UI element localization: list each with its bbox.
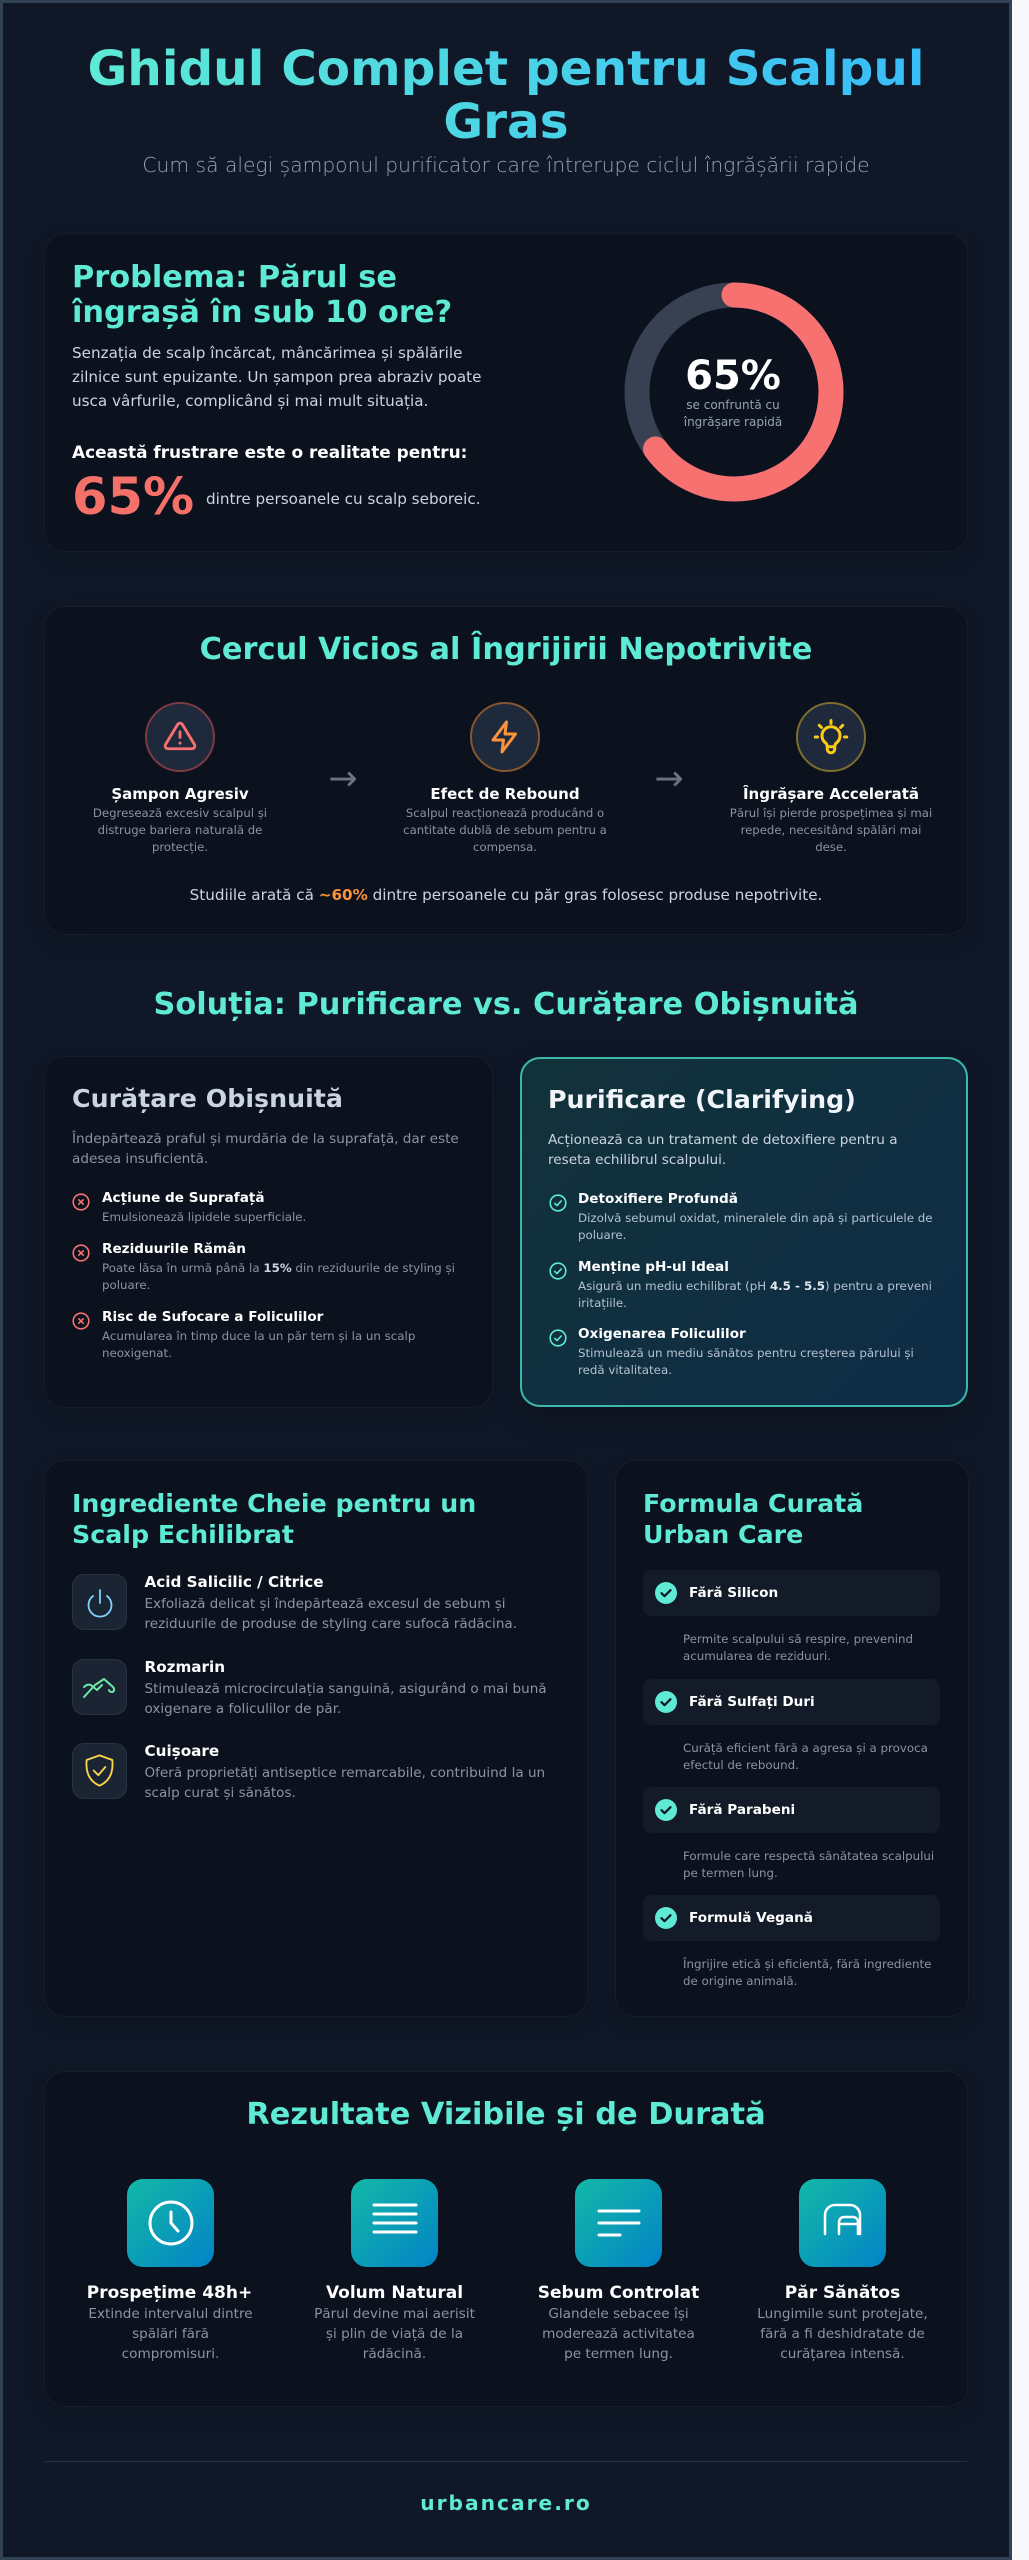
panel: clarifying [520,1057,968,1407]
claim text [683,1740,928,1774]
step title: Îngrășare Accelerată [743,785,919,803]
stat caption: dintre persoanele cu scalp seboreic. [206,490,481,508]
step description: Părul își pierde prospețimea și mai [730,806,932,820]
result 4 [737,2179,948,2369]
claim text [683,1848,934,1882]
result text: pe termen lung. [564,2346,673,2362]
claim text [683,1956,931,1990]
claim title: Fără Parabeni [689,1802,795,1818]
icon: cross [72,1312,90,1330]
claim text: pe termen lung. [683,1866,778,1880]
result text: fără a fi deshidratate de [760,2326,925,2342]
icon: power [72,1574,127,1630]
ingredient text: scalp curat și sănătos. [144,1785,296,1801]
description: Acționează ca un tratament de detoxifiere pentru a [548,1132,898,1148]
problem description: zilnice sunt epuizante. Un șampon prea abraziv poate [72,368,481,386]
claim 3 [643,1787,940,1887]
result text: Extinde intervalul dintre [88,2306,253,2322]
claim title: Formulă Vegană [689,1910,813,1926]
item title: Detoxifiere Profundă [578,1191,738,1207]
icon: check badge [655,1582,677,1604]
step description: Degresează excesiv scalpul și [93,806,267,820]
result text: Lungimile sunt protejate, [757,2306,928,2322]
study note: Studiile arată că ~60% dintre persoanele cu păr gras folosesc produse nepotrivite. [190,886,822,904]
title: Gras [443,94,569,150]
icon: check badge [655,1691,677,1713]
item title: Risc de Sufocare a Foliculilor [102,1309,323,1325]
arrow 2: → [654,759,684,799]
description: adesea insuficientă. [72,1151,208,1167]
item text: redă vitalitatea. [578,1363,672,1377]
heading: Urban Care [643,1520,803,1548]
title: Ghidul Complet pentru Scalpul [87,41,925,97]
donut caption: se confruntă cu [686,398,780,412]
item 1 [72,1190,306,1224]
ingredient text: oxigenare a foliculilor de păr. [144,1701,341,1717]
item 2 [72,1241,455,1292]
item 3 [72,1309,415,1360]
claim title: Fără Silicon [689,1585,778,1601]
result text [737,2304,948,2364]
result text [513,2304,724,2364]
icon: shield [72,1743,127,1799]
claim text [683,1630,913,1664]
claim row [643,1787,940,1833]
panel: vicious cycle [45,607,967,934]
claim 1 [643,1570,940,1662]
claim text: de origine animală. [683,1974,797,1988]
heading: vicious cycle: Cercul Vicios al Îngrijirii Nepotrivite [200,632,812,667]
donut caption: îngrășare rapidă [684,414,782,428]
step title: Șampon Agresiv [111,785,249,803]
item text: Dizolvă sebumul oxidat, mineralele din apă și particulele de [578,1211,933,1225]
result text [65,2304,276,2364]
description [548,1132,898,1168]
result text: spălări fără [132,2326,209,2342]
title [45,43,967,148]
icon: check [549,1262,567,1280]
item text: iritațiile. [578,1296,627,1310]
item 3 [549,1326,914,1377]
step description: cantitate dublă de sebum pentru a [403,823,607,837]
donut caption [684,398,782,429]
item text [102,1329,415,1360]
result title: Volum Natural [326,2283,463,2303]
heading: Purificare (Clarifying) [548,1085,856,1114]
icon: check badge [655,1799,677,1821]
step description [403,806,607,854]
result title: Păr Sănătos [785,2283,900,2303]
heading: Formula Curată [643,1489,863,1518]
icon: filter lines [575,2179,662,2267]
result title: Prospețime 48h+ [87,2283,252,2303]
icon: rosemary [72,1659,127,1715]
result text: Părul devine mai aerisit [314,2306,475,2322]
claim 4 [643,1895,940,1995]
ingredient 3 [72,1742,545,1801]
ingredient 1 [72,1573,517,1632]
item 2 [549,1259,932,1310]
ingredient title: Acid Salicilic / Citrice [144,1573,324,1591]
item title: Menține pH-ul Ideal [578,1259,729,1275]
item text [578,1211,933,1242]
result text: Glandele sebacee își [548,2306,689,2322]
heading [72,1489,476,1549]
heading: problem: îngrașă în sub 10 ore? [72,295,452,330]
icon: healthy hair arches [799,2179,886,2267]
ingredient text: Oferă proprietăți antiseptice remarcabile, contribuind la un [144,1765,545,1781]
claim text: Îngrijire etică și eficientă, fără ingrediente [683,1956,931,1970]
result text: rădăcină. [363,2346,426,2362]
ingredient title: Rozmarin [144,1658,225,1676]
heading [643,1489,863,1548]
result text: și plin de viață de la [326,2326,463,2342]
arrow 1: → [328,759,358,799]
problem description: usca vârfurile, complicând și mai mult situația. [72,392,428,410]
result 3 [513,2179,724,2369]
icon: cross [72,1244,90,1262]
claim row [643,1570,940,1616]
icon: cross [72,1193,90,1211]
heading: Scalp Echilibrat [72,1520,294,1549]
result text [289,2304,500,2364]
step description: repede, necesitând spălări mai [741,823,921,837]
result text: compromisuri. [122,2346,219,2362]
heading: Rezultate Vizibile și de Durată [246,2097,766,2132]
icon: clock [127,2179,214,2267]
result 2 [289,2179,500,2369]
step 1 [93,702,267,854]
item text: neoxigenat. [102,1346,172,1360]
ingredient text [144,1765,545,1801]
section heading: solution: Soluția: Purificare vs. Curățare Obișnuită [153,987,859,1022]
big stat 65%: 65% [72,468,194,527]
icon: check [549,1194,567,1212]
result 1 [65,2179,276,2369]
item title: Oxigenarea Foliculilor [578,1326,746,1342]
item text [102,1261,455,1292]
step title: Efect de Rebound [430,785,580,803]
claim text: efectul de rebound. [683,1758,799,1772]
item title: Acțiune de Suprafață [102,1190,265,1206]
icon: warning [145,702,215,772]
problem description [72,344,481,410]
ingredient text: Stimulează microcirculația sanguină, asigurând o mai bună [144,1681,547,1697]
heading: problem: Problema: Părul se [72,260,397,295]
icon: lines [351,2179,438,2267]
result text: curățarea intensă. [780,2346,905,2362]
problem description: Senzația de scalp încărcat, mâncărimea și spălările [72,344,462,362]
panel: clean formula [616,1461,968,2016]
step description: compensa. [473,840,537,854]
step description: protecție. [152,840,208,854]
frustration statement: Această frustrare este o realitate pentru: [72,442,467,462]
step 2 [403,702,607,854]
icon: lightning [470,702,540,772]
heading: problem [72,260,452,330]
step description: Scalpul reacționează producând o [406,806,604,820]
claim text: Permite scalpului să respire, prevenind [683,1632,913,1646]
item text: poluare. [578,1228,626,1242]
step description [730,806,932,854]
panel: results [45,2072,967,2406]
ingredient text: Exfoliază delicat și îndepărtează excesul de sebum și [144,1596,506,1612]
claim row [643,1895,940,1941]
panel: regular cleansing [45,1057,492,1407]
claim 2 [643,1679,940,1779]
description [72,1130,459,1167]
ingredient text: reziduurile de produse de styling care sufocă rădăcina. [144,1616,517,1632]
donut chart [624,282,844,502]
ingredient text [144,1596,517,1632]
step description [93,806,267,854]
description: Îndepărtează praful și murdăria de la suprafață, dar este [72,1130,459,1146]
ingredient 2 [72,1658,547,1717]
heading: Curățare Obișnuită [72,1084,343,1113]
icon: check [549,1329,567,1347]
item title: Reziduurile Rămân [102,1241,246,1257]
panel: problem [45,234,967,551]
item text: Emulsionează lipidele superficiale. [102,1210,306,1224]
claim text: Curăță eficient fără a agresa și a provoca [683,1740,928,1754]
step description: distruge bariera naturală de [98,823,262,837]
result text: moderează activitatea [542,2326,695,2342]
step 3 [730,702,932,854]
claim text: Formule care respectă sănătatea scalpului [683,1848,934,1862]
claim title: Fără Sulfați Duri [689,1694,815,1710]
item text: Stimulează un mediu sănătos pentru creșterea părului și [578,1346,914,1360]
result title: Sebum Controlat [538,2283,699,2303]
item text: Asigură un mediu echilibrat (pH 4.5 - 5.5) pentru a preveni [578,1279,932,1293]
icon: light bulb [796,702,866,772]
item 1 [549,1191,933,1242]
heading: Ingrediente Cheie pentru un [72,1489,476,1518]
panel: ingredients [45,1461,587,2016]
item text: poluare. [102,1278,150,1292]
claim text: acumularea de reziduuri. [683,1648,831,1662]
footer website: urbancare.ro [420,2491,592,2515]
item text [578,1279,932,1310]
icon: check badge [655,1907,677,1929]
claim row [643,1679,940,1725]
ingredient title: Cuișoare [144,1742,219,1760]
item text: Acumularea în timp duce la un păr tern și la un scalp [102,1329,415,1343]
donut value: 65% [685,353,781,399]
description: reseta echilibrul scalpului. [548,1152,726,1168]
step description: dese. [815,840,847,854]
subtitle: Cum să alegi șamponul purificator care întrerupe ciclul îngrășării rapide [142,153,870,177]
item text [578,1346,914,1377]
ingredient text [144,1681,547,1717]
item text: Poate lăsa în urmă până la 15% din reziduurile de styling și [102,1261,455,1275]
